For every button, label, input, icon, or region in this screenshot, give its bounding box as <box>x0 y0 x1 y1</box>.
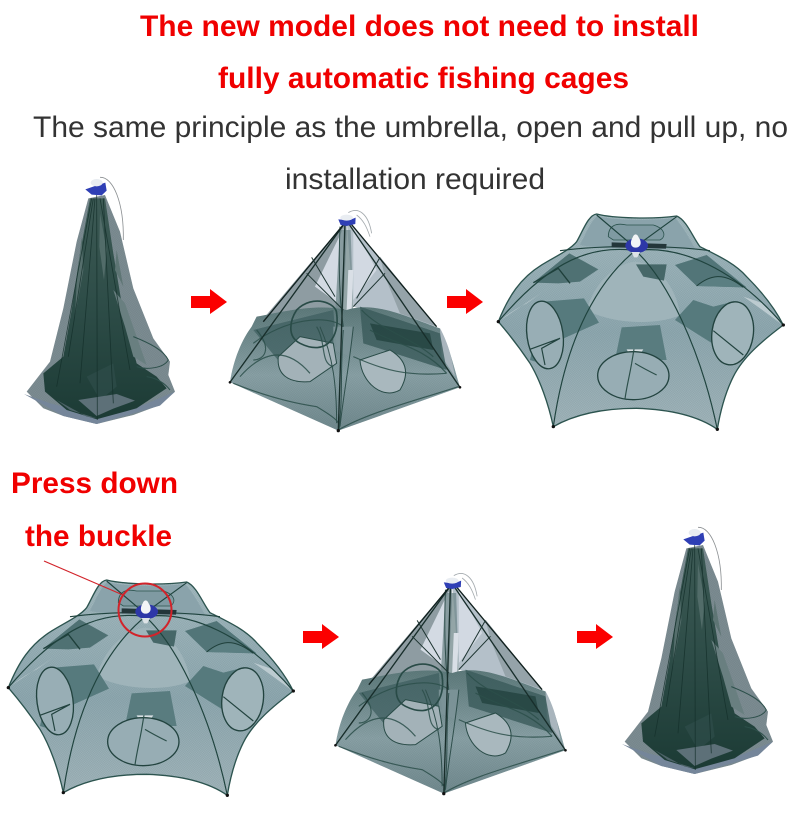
icon: open cage, top row <box>497 214 785 431</box>
arrow: half open to folded <box>577 624 613 649</box>
subtitle line 1: The same principle as the umbrella, open and pull up, no <box>33 111 788 144</box>
icon: half-open cage, bottom row <box>334 574 567 795</box>
callout text line 2: the buckle <box>25 520 172 553</box>
callout: leader line and circle around the buckle <box>44 561 172 636</box>
title line 2: fully automatic fishing cages <box>218 62 629 95</box>
title line 1: The new model does not need to install <box>140 10 699 43</box>
icon: open cage, bottom row <box>7 580 295 797</box>
arrow: half open to open <box>447 289 483 314</box>
subtitle line 2: installation required <box>285 163 545 196</box>
icon: folded cage, bottom row <box>622 527 773 774</box>
icon: folded cage, top row <box>24 177 175 424</box>
arrow: folded to half open <box>191 289 227 314</box>
callout text line 1: Press down <box>11 467 178 500</box>
icon: half-open cage, top row <box>229 211 461 432</box>
arrow: open to half open <box>303 624 339 649</box>
